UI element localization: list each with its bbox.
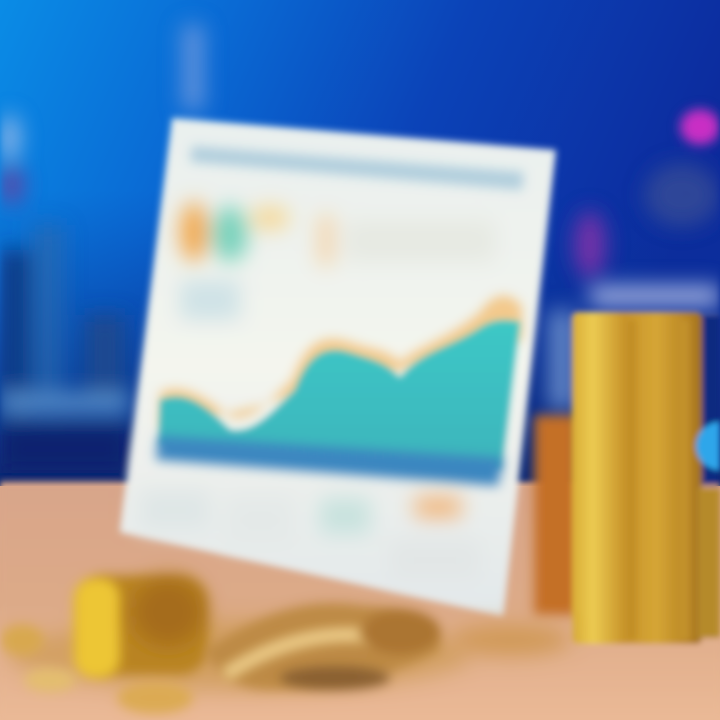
background: blurred city skyline xyxy=(0,25,204,473)
coin pile: foreground gold coins xyxy=(0,575,570,714)
table rows placeholders xyxy=(140,490,480,580)
text block placeholders xyxy=(180,215,495,320)
area chart: orange top line xyxy=(160,295,522,430)
icon: blue circle xyxy=(696,422,720,470)
table surface xyxy=(0,482,720,720)
coin stack: orange back column xyxy=(534,415,578,615)
background: blue sky xyxy=(0,0,720,486)
background: right side lights xyxy=(548,109,720,410)
report title bars xyxy=(190,146,524,190)
area chart: teal area xyxy=(158,320,520,470)
sheet background xyxy=(120,118,556,616)
donut chart xyxy=(180,202,290,262)
area chart: blue base band xyxy=(156,436,504,486)
coin stack: right gold column xyxy=(698,315,720,638)
coin stack: tall gold column xyxy=(572,312,702,644)
background: table base xyxy=(0,486,720,720)
panel: financial report sheet xyxy=(120,118,556,616)
